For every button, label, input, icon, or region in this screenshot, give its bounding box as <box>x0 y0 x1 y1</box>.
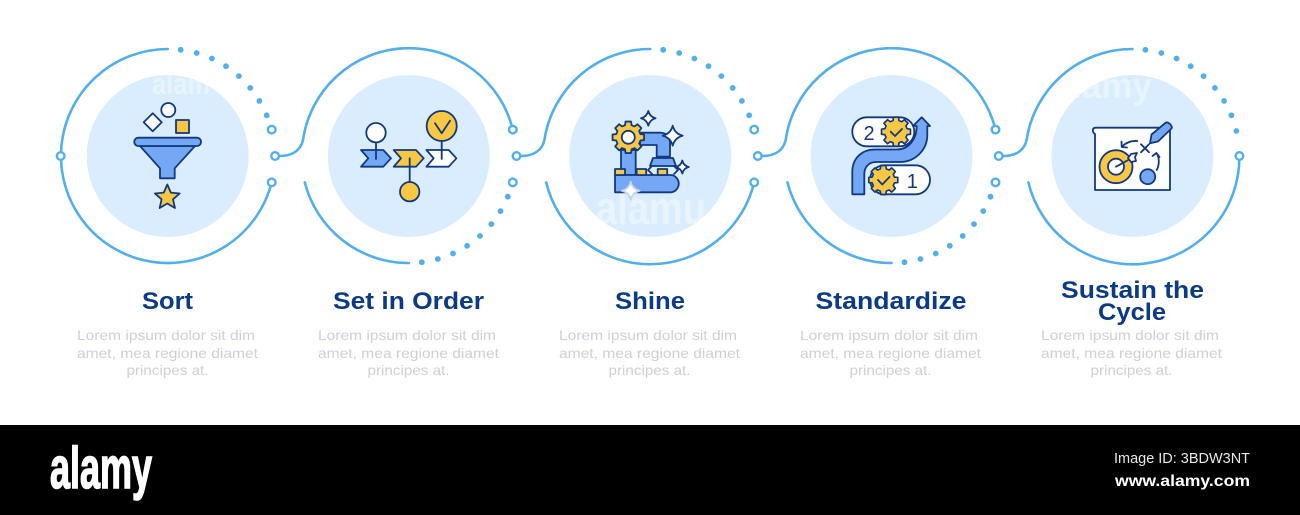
watermark fragment: lamy <box>1072 65 1152 106</box>
text block: standardize description: Lorem ipsum dolor sit dim <box>800 327 978 343</box>
text block: set in order description <box>318 327 499 378</box>
watermark fragment: alam <box>152 68 210 101</box>
text block: shine description: principes at. <box>608 362 690 378</box>
text block: standardize description <box>800 327 981 378</box>
logo: alamy: alamy <box>50 436 152 501</box>
icon: standard route with numbered gears: 1 <box>907 171 918 193</box>
heading: Standardize: Standardize <box>816 288 966 315</box>
icon: standard route with numbered gears <box>852 117 930 194</box>
panel: step 4 standardize <box>754 48 999 378</box>
text block: sort description: principes at. <box>126 362 208 378</box>
text block: sort description: amet, mea regione diamet <box>77 345 258 361</box>
text block: sort description: Lorem ipsum dolor sit dim <box>77 327 255 343</box>
panel: step 5 sustain the cycle <box>995 47 1243 378</box>
footer bar <box>0 425 1300 515</box>
icon: funnel <box>134 103 201 208</box>
panel: step 1 sort <box>57 47 276 378</box>
heading: Set in Order: Set in Order <box>333 288 484 315</box>
watermark fragment: alamu <box>596 182 706 234</box>
text block: set in order description: Lorem ipsum dolor sit dim <box>318 327 496 343</box>
icon: process flow <box>361 111 457 201</box>
ring 1 <box>57 47 276 263</box>
text block: set in order description: principes at. <box>368 362 450 378</box>
icon: standard route with numbered gears: 2 <box>863 123 875 145</box>
image id: Image ID: 3BDW3NT <box>1114 450 1250 467</box>
panel: step 2 set in order <box>271 48 517 378</box>
icon: strategy board <box>1093 122 1172 190</box>
ring 3 <box>513 47 758 264</box>
heading: Shine: Shine <box>615 288 685 315</box>
heading: Sort: Sort <box>142 288 193 315</box>
text block: sustain description: Lorem ipsum dolor sit dim <box>1041 327 1219 343</box>
text block: standardize description: principes at. <box>850 362 932 378</box>
heading: Sustain the Cycle: Sustain the <box>1061 277 1204 304</box>
text block: sustain description: amet, mea regione diamet <box>1041 345 1222 361</box>
text block: sustain description: principes at. <box>1090 362 1172 378</box>
text block: sustain description <box>1041 327 1222 378</box>
heading: Sustain the Cycle <box>1061 277 1204 326</box>
heading: Sustain the Cycle: Cycle <box>1098 299 1166 326</box>
text block: shine description: Lorem ipsum dolor sit dim <box>559 327 737 343</box>
ring 4 <box>754 48 999 265</box>
ring 2 <box>271 48 517 265</box>
text block: standardize description: amet, mea regione diamet <box>800 345 981 361</box>
text block: set in order description: amet, mea regione diamet <box>318 345 499 361</box>
text block: sort description <box>77 327 258 378</box>
text block: shine description: amet, mea regione diamet <box>559 345 740 361</box>
icon: robot arm and conveyor <box>613 111 689 200</box>
ring 5 <box>995 47 1243 264</box>
website: www.alamy.com <box>1114 473 1250 490</box>
text block: shine description <box>559 327 740 378</box>
panel: step 3 shine <box>513 47 758 378</box>
